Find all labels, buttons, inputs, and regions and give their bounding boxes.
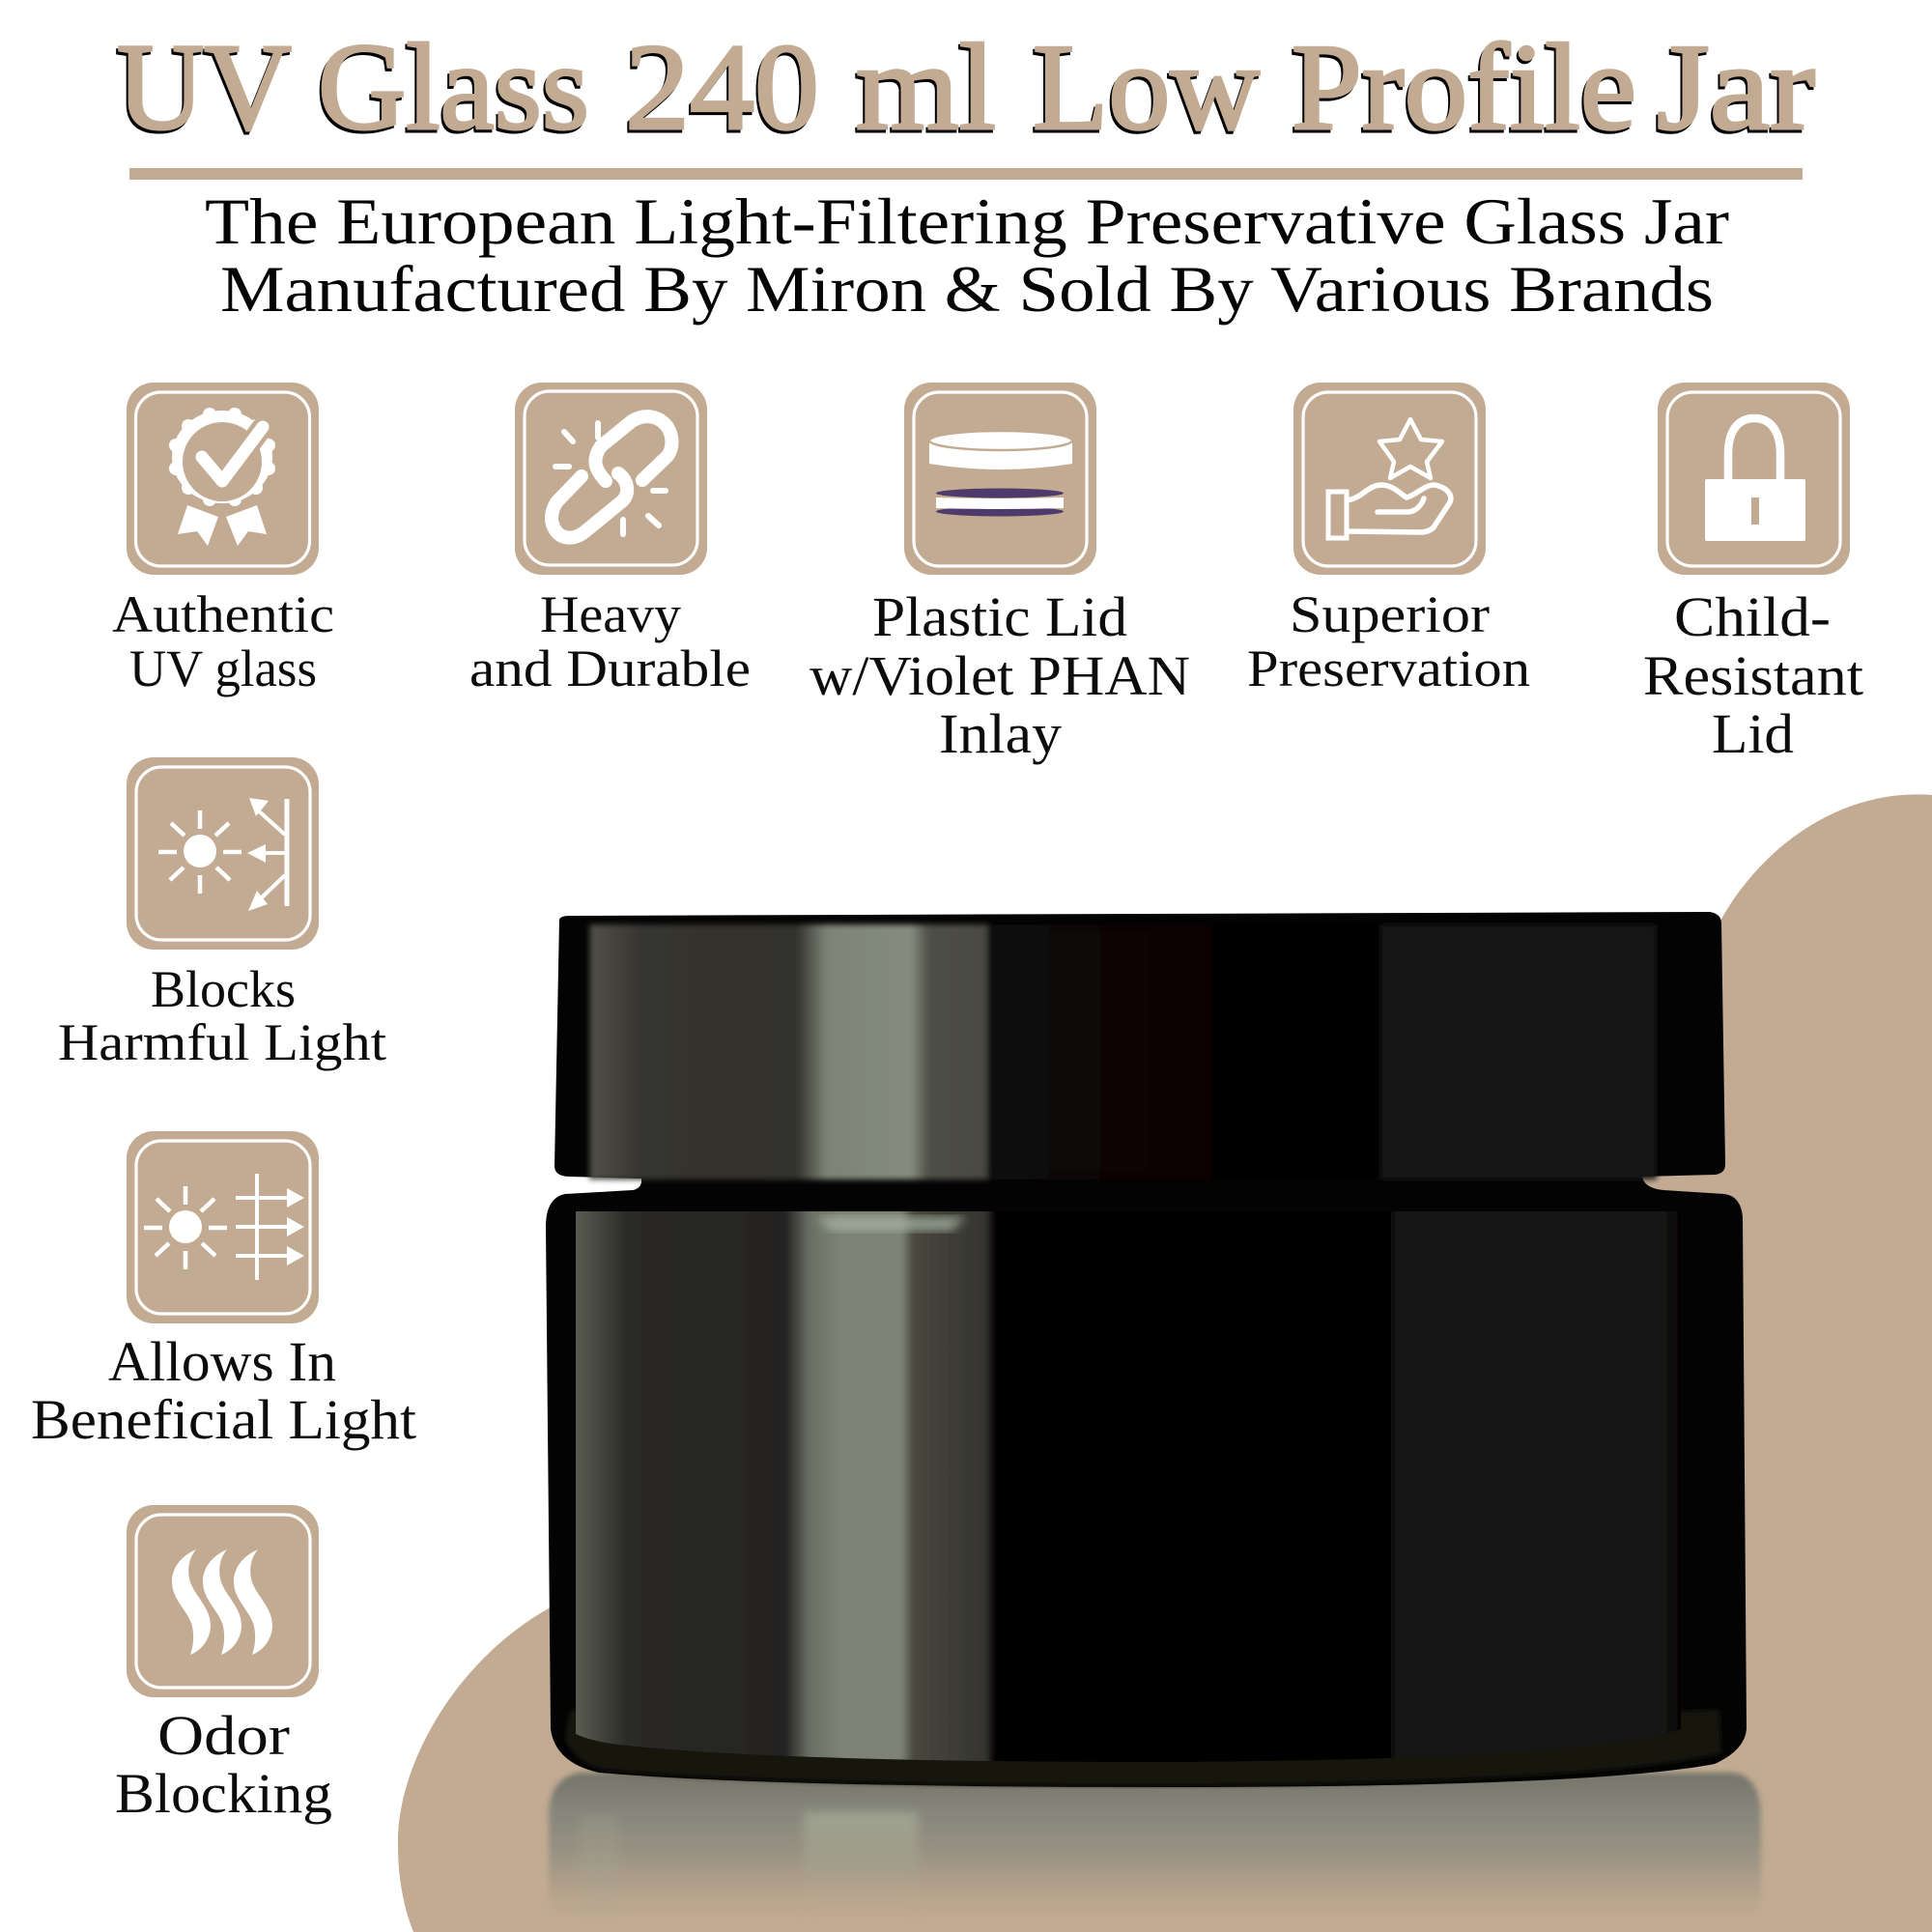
label [810, 585, 1190, 765]
jar reflection [549, 1773, 1761, 1922]
title: ml [856, 18, 996, 156]
feature: allows in beneficial light [31, 1131, 416, 1451]
title [117, 18, 1815, 156]
jar lid [589, 924, 1657, 1179]
label: and Durable [469, 639, 751, 697]
background blob [398, 794, 1932, 1932]
title: UV [117, 18, 292, 156]
label: w/Violet PHAN [810, 644, 1190, 707]
feature: superior preservation [1247, 383, 1530, 697]
icon: award ribbon with check [127, 383, 319, 575]
label [58, 960, 386, 1071]
label: Authentic [112, 585, 334, 643]
label: Allows In [108, 1330, 336, 1393]
label [1247, 585, 1530, 697]
subtitle [205, 185, 1729, 326]
label: Preservation [1247, 639, 1530, 697]
title rule [129, 168, 1803, 180]
jar base band [565, 1710, 1721, 1785]
label: Lid [1712, 702, 1794, 765]
label: Plastic Lid [872, 585, 1127, 648]
icon: sun with reflected arrows [127, 757, 319, 950]
label [469, 585, 751, 697]
label: Resistant [1643, 644, 1863, 707]
label: Blocking [115, 1762, 332, 1825]
feature: plastic lid with violet inlay [810, 383, 1190, 765]
icon: sun with passing arrows [127, 1131, 319, 1323]
feature: child-resistant lid [1643, 383, 1863, 765]
jar silhouette [546, 912, 1747, 1787]
label: Odor [157, 1704, 290, 1767]
icon: odor waves [127, 1505, 319, 1697]
label: UV glass [129, 639, 317, 697]
label: Harmful Light [58, 1013, 386, 1071]
title: Glass [318, 18, 589, 156]
label [31, 1330, 416, 1451]
title: Jar [1657, 18, 1815, 156]
feature: blocks harmful light [58, 757, 386, 1071]
icon: padlock [1658, 383, 1850, 575]
feature: odor blocking [115, 1505, 332, 1825]
title: Low [1033, 18, 1260, 156]
subtitle: The European Light-Filtering Preservative Glass Jar [205, 185, 1729, 258]
label: Superior [1290, 585, 1490, 643]
icon: hand holding star [1293, 383, 1486, 575]
label [112, 585, 334, 697]
icon: chain link [515, 383, 707, 575]
label: Child- [1674, 585, 1831, 648]
label: Blocks [151, 960, 296, 1018]
label: Beneficial Light [31, 1388, 416, 1451]
label [1643, 585, 1863, 765]
title: 240 [625, 18, 819, 156]
title: Profile [1292, 18, 1636, 156]
feature: heavy and durable [469, 383, 751, 697]
jar photo [546, 912, 1761, 1922]
label [115, 1704, 332, 1825]
icon: lid and violet inlay [904, 383, 1096, 575]
subtitle: Manufactured By Miron & Sold By Various Brands [220, 252, 1714, 326]
label: Heavy [540, 585, 681, 643]
label: Inlay [939, 702, 1062, 765]
feature: authentic UV glass [112, 383, 334, 697]
jar body [570, 1203, 1690, 1773]
